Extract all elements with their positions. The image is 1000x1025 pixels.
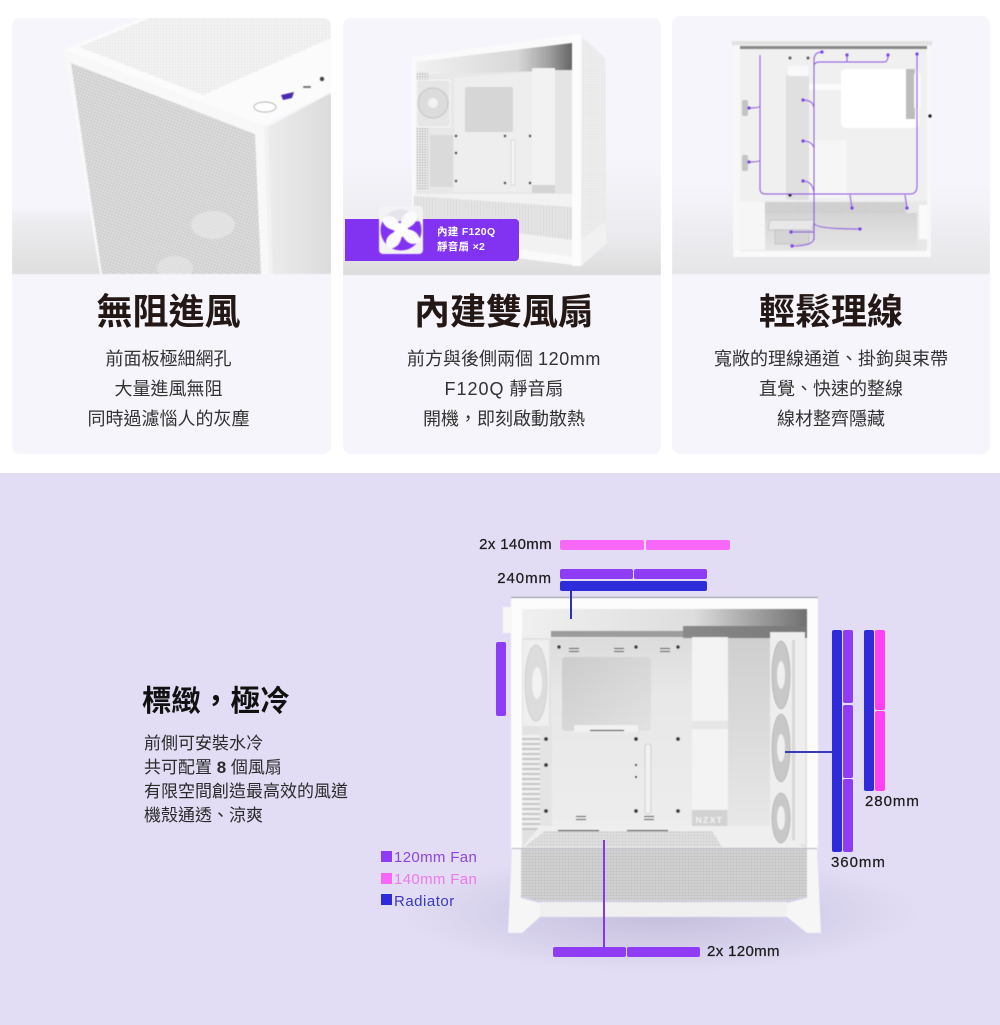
- text: free airflow: 大量進風無阻: [114, 379, 222, 399]
- panel: free airflow: [12, 18, 331, 454]
- text: cooling description: 共可配置 8 個風扇: [144, 758, 282, 777]
- label: purple banner with fan: [345, 219, 519, 261]
- label: 360mm: 360mm: [831, 854, 886, 871]
- text: cooling description: 前側可安裝水冷: [144, 734, 263, 753]
- text: free airflow: [88, 349, 250, 429]
- heading: free airflow: 無阻進風: [96, 291, 240, 332]
- bar: rear 120mm fan: [496, 642, 506, 716]
- text: built-in dual fans: [407, 349, 601, 429]
- bars: bottom 120mm fans: [553, 840, 700, 957]
- legend: [381, 849, 477, 910]
- panel: easy cable management: [672, 16, 990, 454]
- text: cooling description: [144, 734, 348, 825]
- text: banner caption: [437, 226, 495, 253]
- text: built-in dual fans: F120Q 靜音扇: [444, 379, 564, 399]
- rear fan: [523, 640, 549, 726]
- panel: built-in dual fans: [343, 18, 661, 454]
- bars: top 140mm fans: [560, 540, 730, 550]
- panel: liquid cooling support: [0, 473, 1000, 1025]
- legend item: 120mm fan: 120mm Fan: [394, 849, 477, 866]
- text: free airflow: 同時過濾惱人的灰塵: [88, 409, 250, 429]
- text: banner caption: 靜音扇 ×2: [437, 241, 485, 253]
- image: case rear with purple cable routes: [672, 41, 990, 274]
- case interior: [522, 609, 807, 849]
- text: built-in dual fans: 前方與後側兩個 120mm: [407, 349, 601, 369]
- heading: easy cable management: 輕鬆理線: [759, 291, 903, 332]
- label: 2x 120mm: 2x 120mm: [707, 943, 780, 960]
- icon: F120Q fan: [378, 206, 424, 255]
- legend item: 140mm fan: 140mm Fan: [394, 871, 477, 888]
- text: easy cable management: 直覺、快速的整線: [759, 379, 903, 399]
- NZXT logo: NZXT: [696, 815, 723, 825]
- floor shadow: [400, 853, 920, 973]
- bars: top 240mm fans and radiator: [560, 569, 707, 619]
- text: easy cable management: 線材整齊隱藏: [777, 409, 885, 429]
- front fans: [770, 632, 805, 844]
- text: cooling description: 有限空間創造最高效的風道: [144, 782, 348, 801]
- text: easy cable management: [714, 349, 948, 429]
- image: front view of case interior: [503, 596, 822, 934]
- heading: built-in dual fans: 內建雙風扇: [414, 291, 594, 332]
- image: case top corner with mesh front panel: [12, 18, 331, 274]
- bars: front 280mm radiator and fans: [864, 630, 885, 791]
- bars: front 360mm radiator and fans: [785, 630, 853, 852]
- text: built-in dual fans: 開機，即刻啟動散熱: [423, 409, 585, 429]
- label: 2x 140mm: 2x 140mm: [479, 536, 552, 553]
- text: cooling description: 機殼通透、涼爽: [144, 806, 263, 825]
- case base with mesh shroud and feet: [508, 848, 821, 933]
- text: banner caption: 內建 F120Q: [437, 226, 495, 238]
- case frame: [503, 597, 818, 849]
- heading: sleek and cool: 標緻，極冷: [142, 685, 290, 718]
- label: 280mm: 280mm: [865, 793, 920, 810]
- legend item: radiator: Radiator: [394, 893, 455, 910]
- text: free airflow: 前面板極細網孔: [106, 349, 232, 369]
- image: case with glass side and fan: [343, 38, 661, 276]
- text: easy cable management: 寬敞的理線通道、掛鉤與束帶: [714, 349, 948, 369]
- label: 240mm: 240mm: [497, 570, 552, 587]
